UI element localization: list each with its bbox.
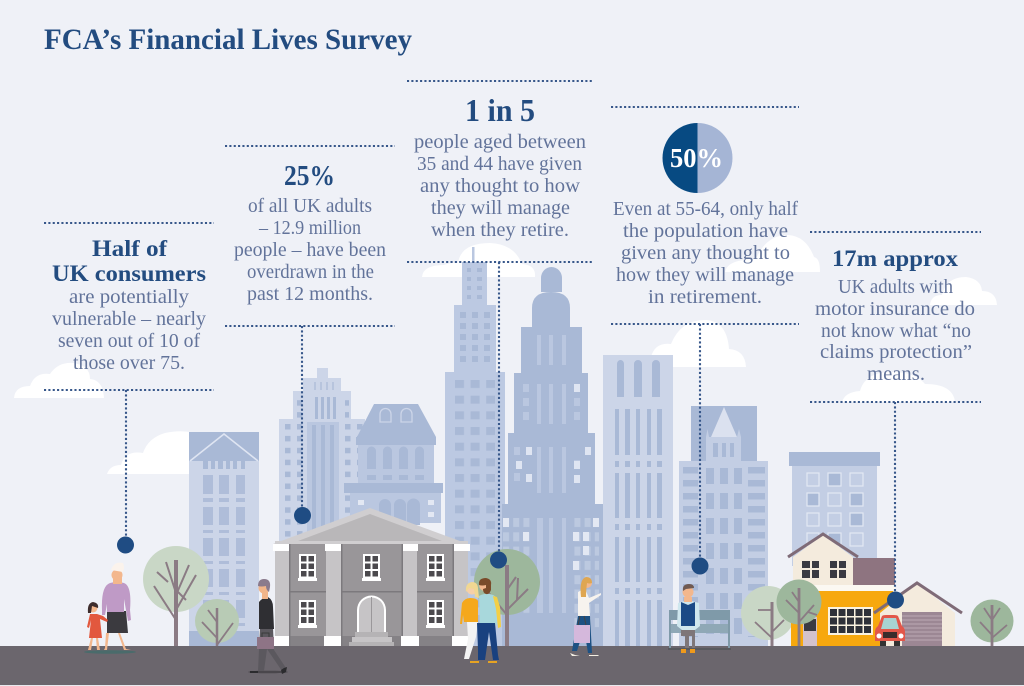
callout: 25% overdrawn: past 12 months. — [247, 284, 373, 305]
callout: 1 in 5: 1 in 5 — [465, 92, 535, 128]
person: businessman — [248, 579, 288, 674]
callout: 17m approx — [810, 232, 981, 608]
person: man on bench — [668, 584, 731, 653]
building: stepped skyscraper — [502, 267, 603, 646]
building: tall tower — [445, 247, 505, 646]
building: classic tower — [189, 432, 259, 646]
bank building — [273, 508, 470, 648]
callout: 1 in 5: any thought to how — [420, 176, 580, 197]
marker dot — [490, 552, 507, 568]
marker dot — [117, 536, 134, 554]
callout: 50% retirement: the population have — [623, 221, 788, 242]
callout: half of UK consumers: Half of — [92, 236, 167, 261]
pie chart: 50% — [663, 123, 732, 193]
person: couple — [460, 578, 501, 663]
callout: half of UK consumers: those over 75. — [73, 353, 185, 374]
callout: 17m approx: claims protection” — [820, 342, 972, 363]
tree: far right — [970, 600, 1014, 646]
callout: 17m approx: means. — [867, 364, 925, 385]
callout: 1 in 5: 35 and 44 have given — [417, 154, 582, 175]
callout: 1 in 5: people aged between — [414, 132, 586, 153]
tree: small left — [195, 599, 239, 646]
tree: right dark — [776, 580, 822, 646]
callout: 1 in 5: when they retire. — [431, 220, 569, 241]
title: FCA’s Financial Lives Survey — [44, 23, 412, 56]
person: woman shopping — [570, 577, 601, 656]
callout: 50% retirement: given any thought to — [621, 243, 790, 264]
building: chateau — [344, 404, 443, 525]
house and garage — [788, 534, 962, 646]
callout: 17m approx: not know what “no — [821, 321, 971, 342]
marker dot — [294, 507, 311, 524]
callout: 1 in 5: they will manage — [431, 198, 570, 219]
callout: half of UK consumers — [44, 223, 214, 554]
callout: 17m approx: UK adults with — [838, 277, 953, 298]
building: office block — [279, 368, 365, 549]
callout: 25% overdrawn: 25% — [284, 161, 335, 192]
marker dot — [692, 558, 708, 574]
callout: 25% overdrawn: of all UK adults — [248, 196, 372, 217]
callout: 25% overdrawn: overdrawn in the — [247, 262, 374, 283]
callout: half of UK consumers: vulnerable – nearly — [52, 309, 206, 330]
building: striped tower — [603, 355, 673, 646]
pie chart: 50%: 50% — [670, 143, 723, 173]
callout: 1 in 5 — [407, 81, 594, 568]
callout: 50% retirement — [611, 107, 799, 574]
callout: 17m approx: 17m approx — [832, 246, 959, 271]
car — [875, 615, 905, 646]
person: grandmother and child — [84, 563, 136, 654]
marker dot — [887, 592, 904, 608]
callout: half of UK consumers: UK consumers — [52, 261, 206, 286]
callout: 50% retirement: in retirement. — [648, 287, 762, 308]
building: gothic tower — [679, 406, 768, 646]
callout: 17m approx: motor insurance do — [815, 299, 975, 320]
clouds — [14, 235, 997, 474]
tree: large left — [143, 546, 209, 646]
callout: half of UK consumers: are potentially — [69, 287, 189, 308]
callout: half of UK consumers: seven out of 10 of — [58, 331, 201, 352]
tree: right pale — [741, 586, 795, 646]
callout: 25% overdrawn: people – have been — [234, 240, 386, 261]
callout: 50% retirement: Even at 55-64, only half — [613, 199, 798, 220]
building: apartment block — [789, 452, 880, 566]
bank windows — [298, 554, 445, 628]
callout: 25% overdrawn — [225, 146, 395, 524]
bank door — [349, 596, 394, 647]
callout: 25% overdrawn: – 12.9 million — [258, 218, 361, 239]
callout: 50% retirement: how they will manage — [616, 265, 794, 286]
tree: centre — [474, 549, 540, 648]
ground — [0, 646, 1024, 685]
